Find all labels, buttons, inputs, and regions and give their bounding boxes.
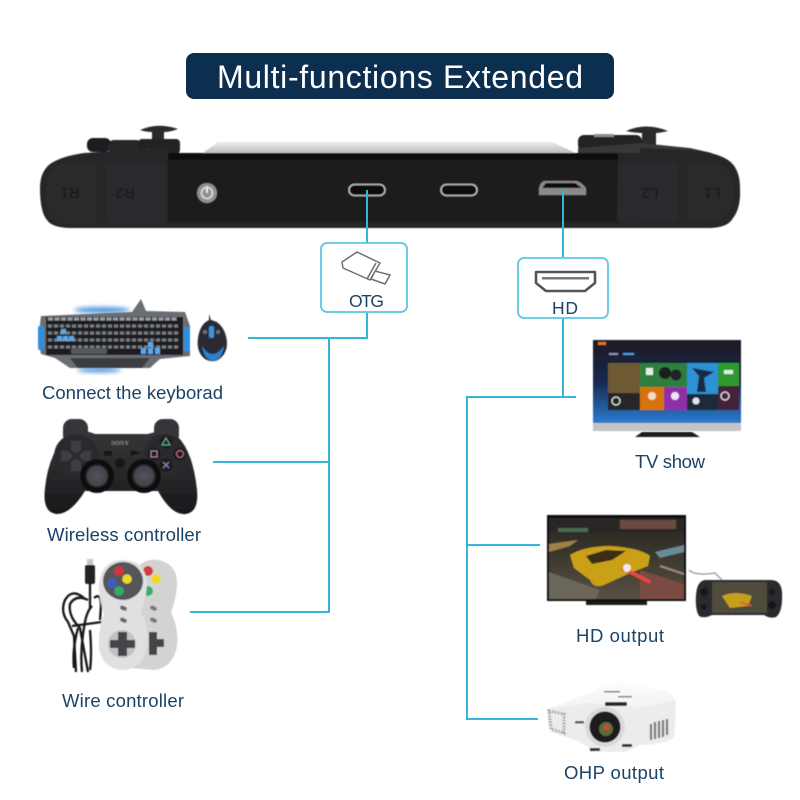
right bumper L2 (617, 163, 678, 224)
keyboard (38, 299, 190, 372)
power button (197, 183, 217, 203)
right shoulder buttons and stick (578, 126, 712, 156)
monitor (547, 515, 686, 605)
label: keyboard: Connect the keyborad (42, 382, 223, 403)
handheld with game (696, 580, 782, 618)
OTG adapter box (321, 243, 407, 312)
icon: USB adapter (342, 252, 390, 284)
HD adapter box (518, 258, 608, 318)
right bumper L1: L1 (704, 184, 720, 201)
console body (40, 148, 740, 228)
right bumper L2: L2 (642, 184, 658, 201)
connector lines (190, 190, 576, 719)
right vent (651, 719, 667, 740)
keyboard and mouse photo (38, 299, 227, 372)
label: wireless controller: Wireless controller (47, 524, 201, 545)
projector photo (548, 683, 676, 752)
handheld console, top edge view (40, 126, 740, 228)
label: TV show: TV show (635, 451, 706, 472)
left bumper R1 (46, 163, 96, 224)
title banner: Multi-functions Extended (217, 59, 583, 95)
rear controller (130, 560, 177, 670)
left bumper R2 (105, 163, 167, 226)
wireless gamepad photo: SONY (111, 440, 129, 447)
front controller (99, 560, 148, 670)
icon: HDMI plug (536, 272, 595, 291)
USB cable (63, 583, 102, 672)
TV app tiles (608, 363, 739, 410)
HDMI cable (689, 570, 722, 580)
wired SNES-style controllers photo (63, 559, 177, 672)
label: HD output: HD output (576, 625, 664, 646)
right bumper L1 (688, 163, 734, 222)
wireless gamepad photo (44, 419, 197, 514)
label: OHP output: OHP output (564, 762, 664, 783)
title banner (186, 53, 614, 99)
television photo (593, 340, 741, 437)
port panel (168, 160, 618, 222)
HD adapter box: HD (552, 298, 578, 318)
left vent (549, 711, 564, 733)
label: wire controller: Wire controller (62, 690, 184, 711)
OTG adapter box: OTG (349, 291, 384, 311)
left shoulder buttons and stick (87, 126, 180, 154)
mini HDMI port (539, 181, 586, 195)
screen edge (200, 142, 580, 155)
USB-C port: OTG (349, 184, 385, 196)
mouse (198, 314, 227, 361)
HD monitor with racing game and connected handheld (547, 515, 782, 618)
left bumper R2: R2 (115, 184, 135, 201)
left bumper R1: R1 (60, 184, 80, 201)
USB-C port: charge (441, 184, 477, 196)
dark rim above port panel (168, 153, 618, 160)
